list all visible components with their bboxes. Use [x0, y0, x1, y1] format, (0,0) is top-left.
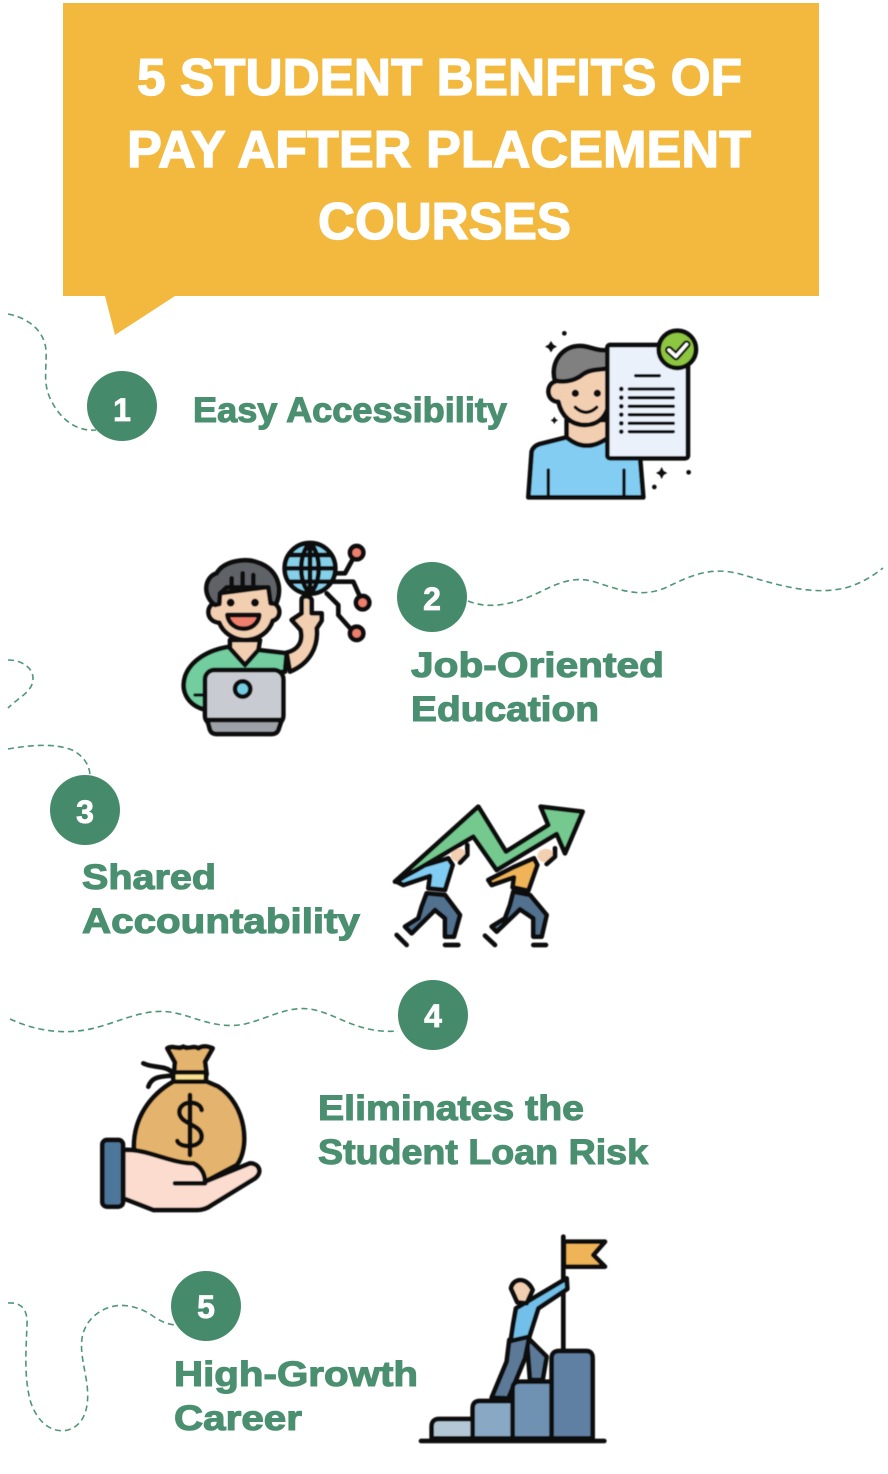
icon: two people carrying arrow [395, 807, 583, 945]
step 3: shared accountability [50, 775, 583, 945]
dashed connector 2 [468, 568, 883, 605]
step 2: job-oriented education [184, 543, 664, 734]
number badge 2 [397, 562, 467, 632]
label 2: Job-Oriented [411, 646, 664, 685]
step 1: easy accessibility [87, 331, 696, 497]
label 4 [318, 1089, 649, 1172]
dashed connector 5 [10, 1009, 398, 1032]
label 1: Easy Accessibility [193, 391, 508, 430]
icon: climber reaching flag on rising bars [421, 1237, 605, 1441]
label 3 [82, 858, 361, 941]
step 5: high-growth career [171, 1237, 605, 1441]
dashed connector 3 [8, 660, 33, 708]
icon: person with document [528, 331, 696, 497]
title text: PAY AFTER PLACEMENT [127, 121, 751, 179]
number badge 5: 5 [197, 1289, 215, 1325]
label 2 [411, 646, 664, 729]
icon: student with laptop and globe [184, 543, 369, 734]
number badge 5 [171, 1271, 241, 1341]
title text: COURSES [318, 193, 571, 251]
label 5: Career [174, 1399, 302, 1438]
number badge 3 [50, 775, 120, 845]
title text: 5 STUDENT BENFITS OF [137, 49, 742, 107]
label 4: Eliminates the [318, 1089, 584, 1128]
title banner [63, 3, 819, 335]
number badge 1: 1 [113, 392, 131, 428]
number badge 2: 2 [423, 581, 441, 617]
label 5 [174, 1355, 418, 1438]
number badge 1 [87, 371, 157, 441]
label 5: High-Growth [174, 1355, 418, 1394]
label 2: Education [411, 690, 599, 729]
dashed connector 1 [8, 314, 96, 430]
number badge 3: 3 [76, 794, 94, 830]
title text [127, 49, 751, 251]
number badge 4: 4 [424, 998, 442, 1034]
number badge 4 [398, 980, 468, 1050]
dashed connector 4 [8, 745, 90, 776]
icon: hand holding money bag [102, 1046, 259, 1210]
label 3: Accountability [82, 902, 361, 941]
step 4: eliminates the student loan risk [102, 980, 649, 1210]
label 4: Student Loan Risk [318, 1133, 649, 1172]
label 3: Shared [82, 858, 216, 897]
dashed connector 6 [8, 1303, 175, 1431]
